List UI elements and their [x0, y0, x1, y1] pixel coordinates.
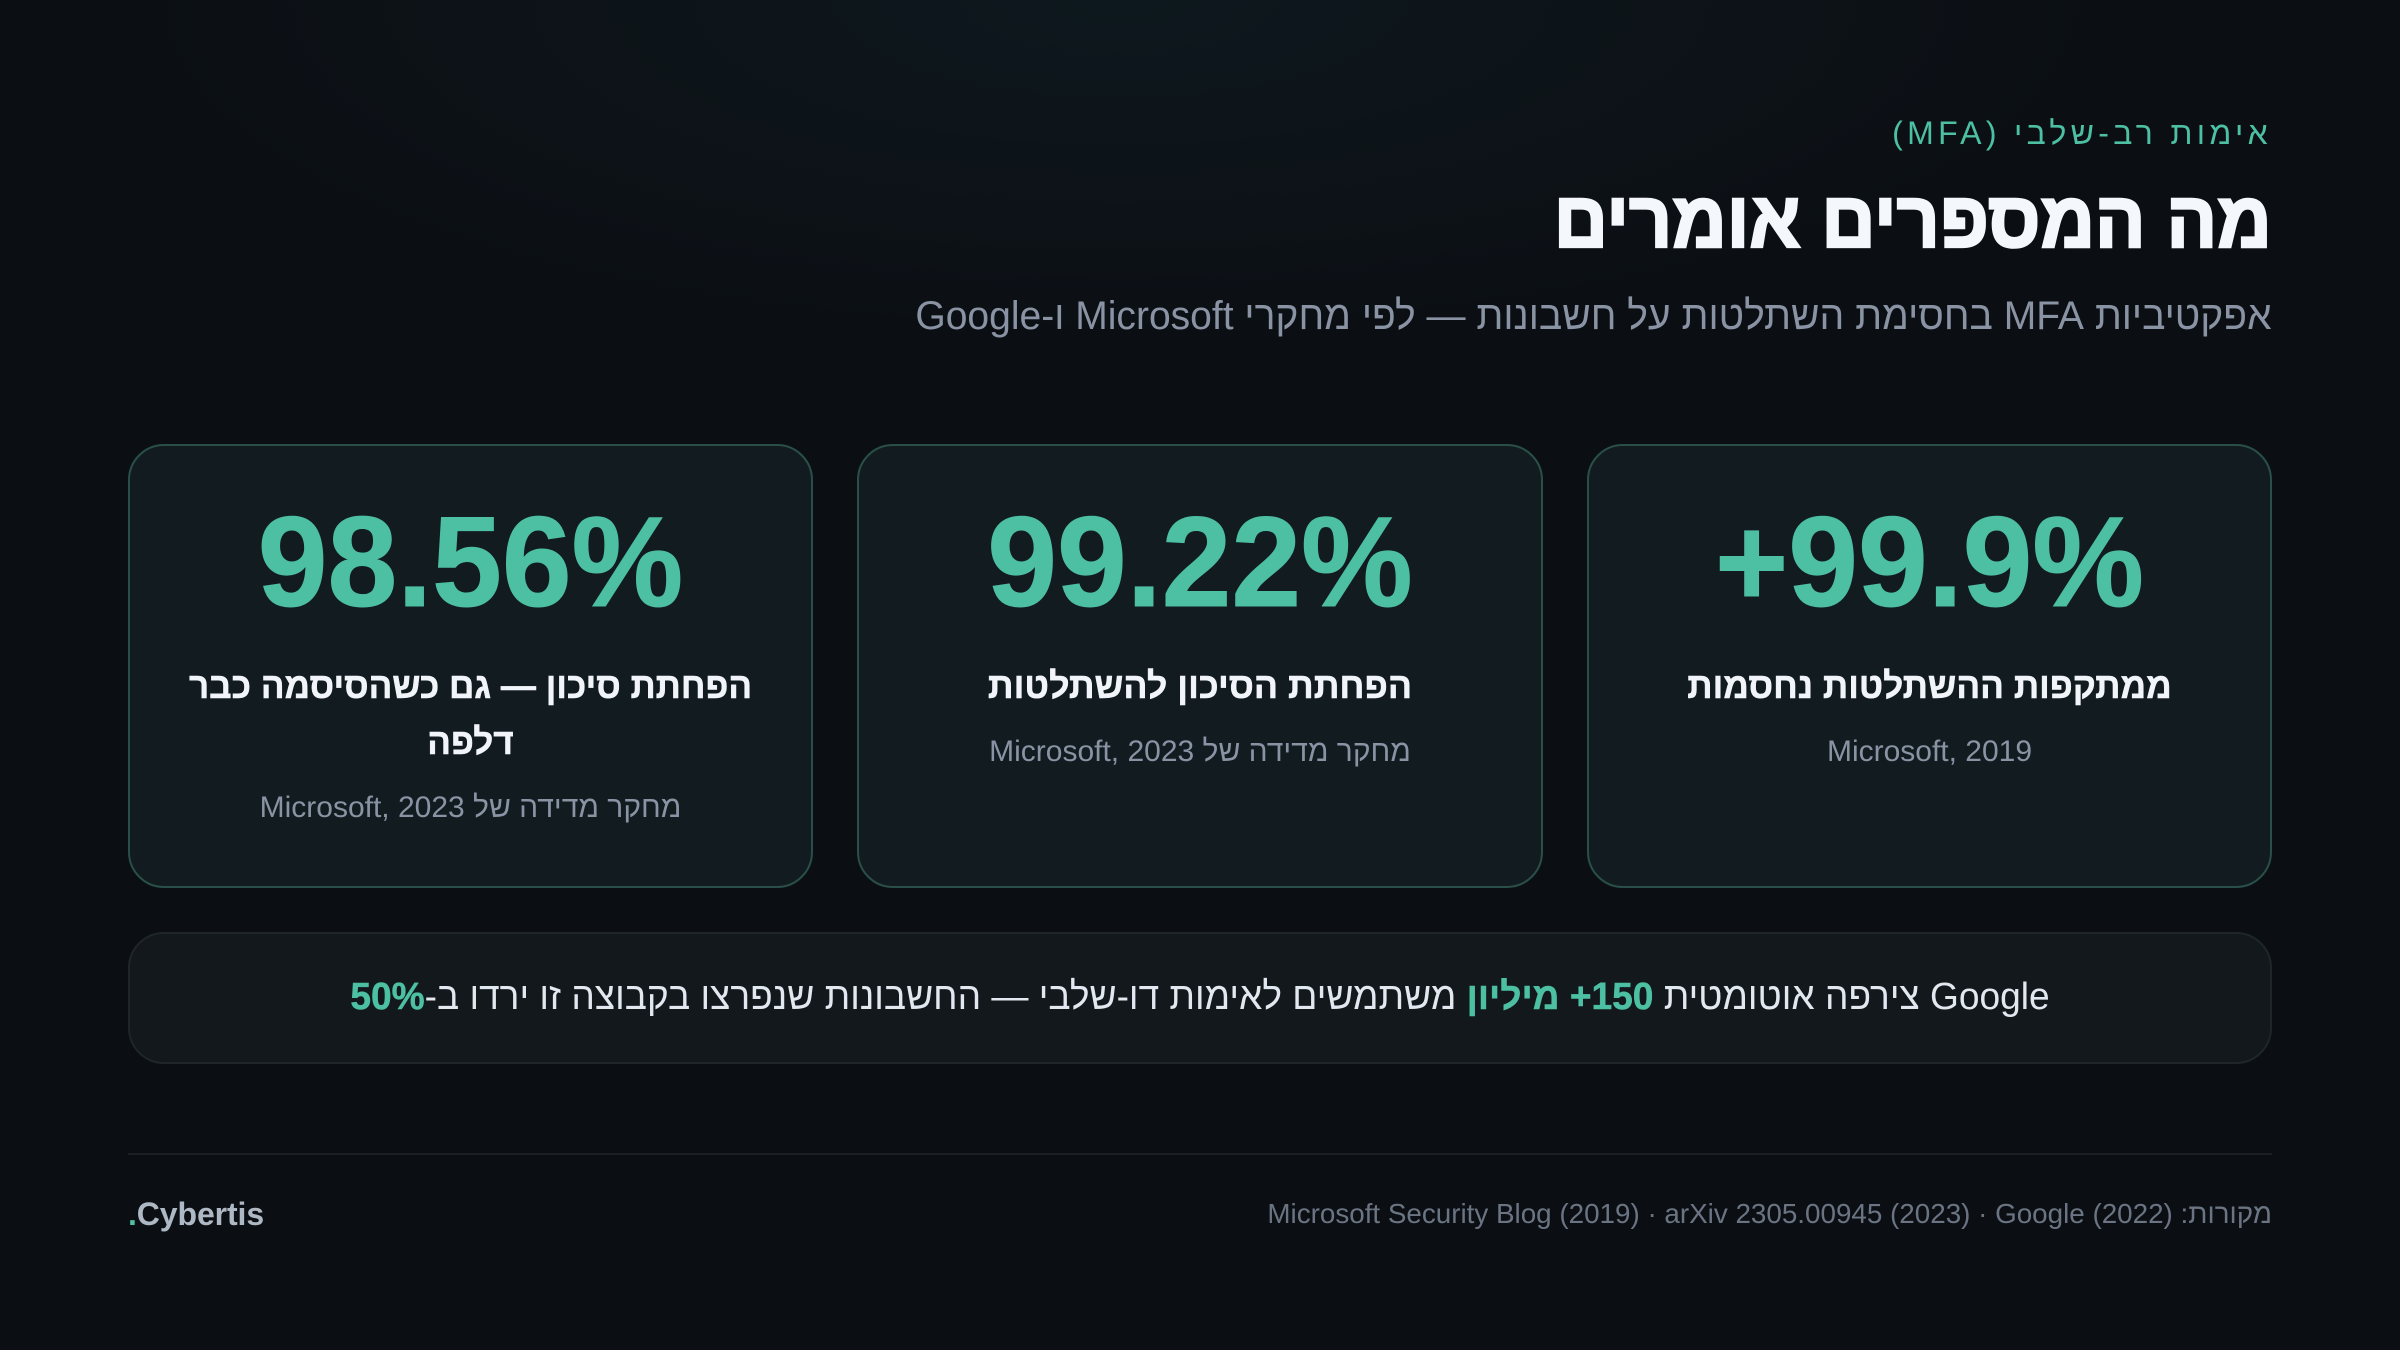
- stat number: +99.9%: [1715, 491, 2144, 634]
- stat source: Microsoft, 2019: [1827, 735, 2032, 768]
- panel: stat card +99.9%: [1587, 444, 2272, 888]
- stat label: הפחתת סיכון — גם כשהסיסמה כבר: [189, 665, 752, 706]
- callout text: Google צירפה אוטומטית +150 מיליון משתמשים לאימות דו-שלבי — החשבונות שנפרצו בקבוצה זו ירדו ב-50%: [350, 976, 2050, 1018]
- stat source: מחקר מדידה של Microsoft, 2023: [260, 791, 681, 824]
- panel: stat card 98.56%: [128, 444, 813, 888]
- brand logo: .Cybertis: [128, 1196, 264, 1232]
- stat label: ממתקפות ההשתלטות נחסמות: [1687, 665, 2172, 706]
- panel: Google callout: [128, 932, 2272, 1064]
- subtitle: אפקטיביות MFA בחסימת השתלטות על חשבונות — לפי מחקרי Microsoft ו-Google: [916, 294, 2272, 338]
- stat label second line: דלפה: [427, 721, 514, 762]
- stat number: 99.22%: [987, 491, 1413, 634]
- eyebrow: אימות רב-שלבי (MFA): [1892, 115, 2272, 151]
- stat label: הפחתת הסיכון להשתלטות: [988, 665, 1412, 706]
- title: מה המספרים אומרים: [1554, 175, 2272, 264]
- panel: stat card 99.22%: [857, 444, 1543, 888]
- stat source: מחקר מדידה של Microsoft, 2023: [989, 735, 1411, 768]
- footer sources: מקורות: Microsoft Security Blog (2019) · arXiv 2305.00945 (2023) · Google (2022): [1267, 1198, 2272, 1229]
- footer divider: [128, 1153, 2272, 1155]
- stat number: 98.56%: [258, 491, 683, 634]
